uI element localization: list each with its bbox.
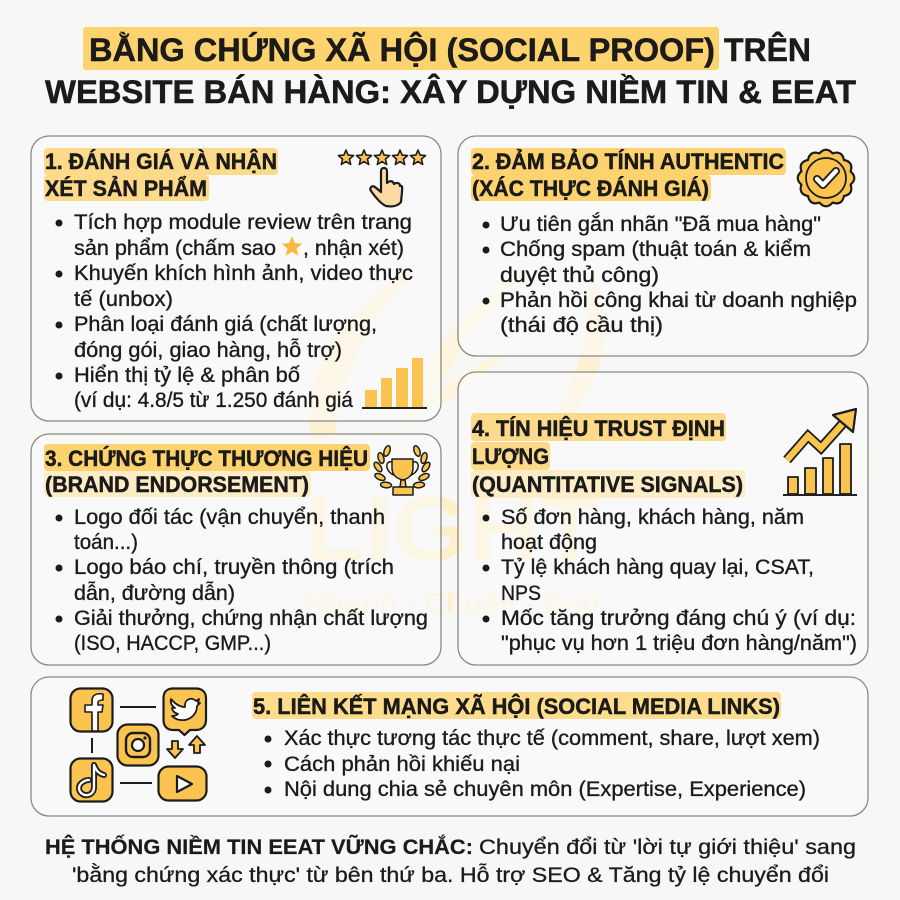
bullet list: panel 1: sản phẩm (chấm sao xyxy=(74,237,276,260)
bullet list: panel 3: toán...) xyxy=(74,531,138,554)
bullet list: panel 1: (ví dụ: 4.8/5 từ 1.250 đánh giá xyxy=(74,389,353,412)
connector lines xyxy=(92,707,156,783)
bullet list: panel 5: Nội dung chia sẻ chuyên môn (Expertise, Experience) xyxy=(284,778,806,801)
bullet list: panel 2: Chống spam (thuật toán & kiểm xyxy=(500,238,811,261)
icon: facebook xyxy=(70,688,112,732)
bullet list: panel 3: dẫn, đường dẫn) xyxy=(74,582,235,605)
footer summary: Chuyển đổi từ 'lời tự giới thiệu' sang xyxy=(479,836,856,859)
bullet list: panel 4 xyxy=(482,506,857,655)
watermark: logo and brand name: Nhanh - Chuẩn - Đẹp xyxy=(305,587,600,620)
bullet list: panel 4: Tỷ lệ khách hàng quay lại, CSAT, xyxy=(501,556,814,579)
icon group: social networks xyxy=(70,688,206,802)
panel: 2 authentic reviews xyxy=(458,136,868,356)
footer summary: 'bằng chứng xác thực' từ bên thứ ba. Hỗ trợ SEO & Tăng tỷ lệ chuyển đổi xyxy=(72,864,829,887)
title: TRÊN xyxy=(724,32,811,68)
bullet list: panel 5: Xác thực tương tác thực tế (comment, share, lượt xem) xyxy=(284,727,820,750)
title: WEBSITE BÁN HÀNG: XÂY DỰNG NIỀM TIN & EEAT xyxy=(45,74,856,110)
icon: growth chart with arrow xyxy=(783,409,857,496)
watermark: logo and brand name: LIGHT xyxy=(305,478,600,580)
heading: panel 1 xyxy=(44,148,278,201)
bullet list: panel 1: Tích hợp module review trên trang xyxy=(74,211,412,234)
bullet list: panel 3: Giải thưởng, chứng nhận chất lượng xyxy=(74,607,428,630)
bullet list: panel 2: Phản hồi công khai từ doanh nghiệp xyxy=(500,289,857,312)
bullet list: panel 5 xyxy=(264,727,820,801)
bullet list: panel 1: , nhận xét) xyxy=(303,237,404,260)
bullet list: panel 2: duyệt thủ công) xyxy=(500,264,659,287)
icon: youtube xyxy=(158,766,206,800)
bullet list: panel 2: (thái độ cầu thị) xyxy=(500,314,663,337)
bullet list: panel 2: Ưu tiên gắn nhãn "Đã mua hàng" xyxy=(500,213,821,236)
watermark: logo and brand name xyxy=(305,268,604,620)
bullet list: panel 1: Hiển thị tỷ lệ & phân bố xyxy=(74,364,300,387)
icon: verified badge xyxy=(798,150,854,206)
bullet list: panel 4: hoạt động xyxy=(501,531,597,554)
heading: panel 1: 1. ĐÁNH GIÁ VÀ NHẬN xyxy=(45,149,277,174)
bullet list: panel 2 xyxy=(482,213,857,337)
icon: arrows up and down xyxy=(167,736,205,758)
footer summary: HỆ THỐNG NIỀM TIN EEAT VỮNG CHẮC: xyxy=(45,835,473,859)
bullet list: panel 1: Phân loại đánh giá (chất lượng, xyxy=(74,313,377,336)
heading: panel 4: LƯỢNG xyxy=(472,444,549,469)
heading: panel 1: XÉT SẢN PHẨM xyxy=(45,176,207,201)
heading: panel 2: 2. ĐẢM BẢO TÍNH AUTHENTIC xyxy=(472,149,784,174)
bullet list: panel 1: Khuyến khích hình ảnh, video thực xyxy=(74,262,413,285)
heading: panel 3: 3. CHỨNG THỰC THƯƠNG HIỆU xyxy=(45,446,368,471)
heading: panel 4: 4. TÍN HIỆU TRUST ĐỊNH xyxy=(472,416,725,441)
bullet list: panel 4: Số đơn hàng, khách hàng, năm xyxy=(501,506,804,529)
heading: panel 4 xyxy=(471,413,745,498)
bullet list: panel 1: đóng gói, giao hàng, hỗ trợ) xyxy=(74,339,342,362)
icon: tiktok xyxy=(70,758,112,802)
bullet list: panel 3: Logo đối tác (vận chuyển, thanh xyxy=(74,506,385,529)
bullet list: panel 4: NPS xyxy=(501,582,541,605)
bullet list: panel 1 xyxy=(56,211,413,412)
panel: 1 product reviews xyxy=(31,136,441,421)
bullet list: panel 3 xyxy=(56,506,428,655)
icon: trophy with laurel xyxy=(373,445,431,495)
bullet list: panel 3: (ISO, HACCP, GMP...) xyxy=(74,632,271,655)
heading: panel 2 xyxy=(471,148,786,201)
title: BẰNG CHỨNG XÃ HỘI (SOCIAL PROOF) xyxy=(89,32,715,68)
icon: twitter xyxy=(164,688,206,735)
heading: panel 5: 5. LIÊN KẾT MẠNG XÃ HỘI (SOCIAL MEDIA LINKS) xyxy=(253,694,780,719)
panel: 5 social media links xyxy=(31,677,868,816)
heading: panel 4: (QUANTITATIVE SIGNALS) xyxy=(472,472,743,497)
title xyxy=(45,27,856,110)
bullet list: panel 5: Cách phản hồi khiếu nại xyxy=(284,753,520,776)
bullet list: panel 4: "phục vụ hơn 1 triệu đơn hàng/năm") xyxy=(501,632,857,655)
icon: instagram xyxy=(118,724,158,766)
panel: 3 brand endorsement xyxy=(31,434,441,665)
icon: inline star xyxy=(282,236,302,256)
heading: panel 3: (BRAND ENDORSEMENT) xyxy=(45,472,309,497)
bullet list: panel 4: Mốc tăng trưởng đáng chú ý (ví dụ: xyxy=(501,607,856,630)
bullet list: panel 1: tế (unbox) xyxy=(74,288,173,311)
footer summary xyxy=(45,835,856,887)
panel: 4 quantitative trust signals xyxy=(458,372,868,665)
heading: panel 3 xyxy=(44,444,370,497)
heading: panel 2: (XÁC THỰC ĐÁNH GIÁ) xyxy=(472,176,709,201)
icon: pointing hand xyxy=(370,168,402,206)
bullet list: panel 3: Logo báo chí, truyền thông (trích xyxy=(74,556,394,579)
icon: five stars xyxy=(338,150,426,164)
icon: bar chart xyxy=(362,358,427,409)
